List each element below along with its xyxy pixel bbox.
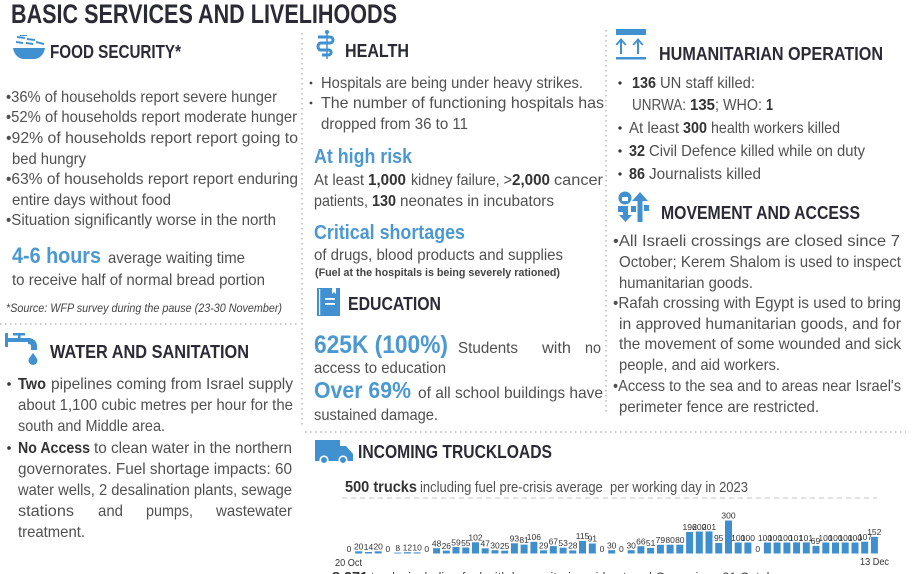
food security bullets: bed hungry [12, 151, 86, 168]
callout: waiting time: 4-6 hours [12, 243, 101, 268]
water bullets: No Access [18, 440, 90, 457]
bar chart: 25 [500, 541, 510, 551]
bar chart: 101 [799, 533, 813, 543]
access bullets: perimeter fence are restricted. [619, 399, 819, 416]
bar chart: 20 [373, 542, 383, 552]
heading: food security: FOOD SECURITY* [50, 42, 181, 62]
callout: waiting time [12, 243, 265, 289]
bar chart: 100 [778, 533, 793, 543]
source note: *Source: WFP survey during the pause (23-30 November) [6, 301, 282, 315]
bar chart: 102 [468, 532, 483, 542]
bar chart: 20 [354, 542, 364, 552]
food security bullets: •63% of households report report enduring [6, 171, 298, 188]
bar chart: 101 [789, 533, 803, 543]
bar chart: 69 [811, 536, 820, 546]
staff losses list: 136 [632, 75, 656, 92]
bar chart: 100 [768, 533, 782, 543]
water bullets: water wells, 2 desalination plants, sewage [17, 482, 292, 499]
heading: water and sanitation: WATER AND SANITATION [50, 342, 249, 362]
bar chart: 67 [549, 536, 558, 546]
icon: water tap [5, 333, 38, 365]
critical shortages: Critical shortages [314, 222, 465, 244]
food security bullets: •52% of households report moderate hunger [6, 109, 298, 126]
access bullets: •Rafah crossing with Egypt is used to bring [613, 295, 901, 312]
food security bullets: •92% of households report report going to [6, 130, 298, 147]
bar chart: 28 [568, 540, 578, 550]
access bullets: people, and aid workers. [619, 357, 780, 374]
staff losses list: 135 [690, 97, 715, 114]
icon: humanitarian arrows [616, 29, 646, 60]
at high risk: At high risk [314, 146, 413, 168]
school buildings stat: Over 69% [314, 377, 411, 403]
food security bullets: •36% of households report severe hunger [6, 89, 278, 106]
bar chart: 0 [600, 544, 605, 554]
icon: food bowl [13, 35, 45, 59]
water bullets: and [98, 503, 123, 520]
staff losses list: Journalists killed [649, 166, 761, 183]
staff losses list: 32 [629, 143, 645, 160]
bar chart: 80 [665, 535, 675, 545]
at high risk: 1,000 [368, 172, 406, 189]
critical shortages: (Fuel at the hospitals is being severely rationed) [315, 267, 560, 279]
bar chart: 80 [675, 535, 685, 545]
bar chart: 79 [656, 535, 665, 545]
school buildings stat: sustained damage. [314, 407, 438, 424]
access bullets: humanitarian goods. [619, 275, 753, 292]
hospital bullets: The number of functioning hospitals has [321, 95, 604, 112]
panel: humanitarian operation [616, 29, 883, 183]
bar chart: 12 [403, 542, 412, 552]
access bullets [613, 233, 902, 416]
water bullets: south and Middle area. [18, 418, 165, 435]
panel: water and sanitation [5, 333, 293, 541]
bar chart: 14 [364, 542, 373, 552]
bar chart: 55 [461, 538, 471, 548]
hospital bullets: Hospitals are being under heavy strikes. [321, 75, 583, 92]
access bullets: •All Israeli crossings are closed since 7 [613, 233, 900, 250]
food security bullets: entire days without food [12, 192, 171, 209]
at high risk: cancer [554, 172, 604, 189]
bar chart [335, 510, 889, 569]
water bullets: pipelines coming from Israel supply [51, 376, 293, 393]
icon: movement arrows with lock [618, 192, 649, 222]
bar chart: 100 [758, 533, 772, 543]
staff losses list: health workers killed [711, 120, 840, 137]
water bullets: pumps, [146, 503, 193, 520]
water bullets: wastewater [215, 503, 293, 520]
axis label: start date: 20 Oct [335, 558, 362, 569]
staff losses list [618, 75, 865, 183]
bar chart: 30 [490, 540, 500, 550]
students stat: access to education [314, 360, 446, 377]
bar chart: 0 [424, 544, 429, 554]
icon: caduceus [318, 30, 333, 59]
bar chart: 51 [646, 538, 656, 548]
callout: waiting time: to receive half of normal bread portion [12, 272, 265, 289]
at high risk: neonates in incubators [400, 193, 554, 210]
panel: incoming truckloads [315, 440, 889, 574]
bar chart: 91 [588, 534, 597, 544]
panel: movement and access [613, 192, 902, 416]
bar chart: 93 [510, 534, 519, 544]
bar chart: 48 [432, 538, 442, 548]
students stat: 625K (100%) [314, 331, 448, 359]
bar chart: 100 [731, 533, 746, 543]
bar chart: 300 [721, 510, 736, 520]
heading: health: HEALTH [345, 41, 409, 61]
water bullets: treatment. [18, 524, 85, 541]
pre-crisis average [342, 479, 877, 498]
bar chart: 106 [527, 532, 541, 542]
icon: truck [315, 440, 353, 464]
bar chart: 47 [480, 538, 490, 548]
food security bullets [6, 89, 298, 229]
bar chart: 100 [838, 533, 853, 543]
access bullets: October; Kerem Shalom is used to inspect [619, 254, 902, 271]
bar chart: 100 [848, 533, 862, 543]
bar chart: 30 [626, 540, 636, 550]
pre-crisis average: including fuel pre-crisis average per working day in 2023 [420, 479, 748, 496]
critical shortages: of drugs, blood products and supplies [314, 247, 563, 264]
critical shortages [314, 222, 563, 279]
callout: waiting time: average waiting time [108, 250, 245, 267]
staff losses list: UNRWA: [632, 97, 686, 114]
staff losses list: UN staff killed: [660, 75, 755, 92]
bar chart: 66 [636, 536, 646, 546]
panel: education [314, 288, 603, 424]
heading: incoming truckloads: INCOMING TRUCKLOADS [358, 442, 552, 462]
students stat: with [541, 340, 571, 357]
bar chart: 201 [702, 522, 716, 532]
water bullets: stations [18, 503, 74, 520]
bar chart: 29 [539, 540, 549, 550]
bar chart: 0 [619, 544, 624, 554]
at high risk: 130 [372, 193, 396, 210]
panel: food security [6, 35, 298, 315]
staff losses list: At least [629, 120, 680, 137]
bar chart: 0 [386, 544, 391, 554]
food security bullets: •Situation significantly worse in the north [6, 212, 276, 229]
students stat [314, 331, 601, 377]
access bullets: in approved humanitarian goods, and for [619, 316, 902, 333]
heading: humanitarian operation: HUMANITARIAN OPERATION [659, 44, 883, 64]
at high risk: At least [314, 172, 365, 189]
staff losses list: Civil Defence killed while on duty [649, 143, 865, 160]
panel: health [310, 30, 604, 279]
bar chart: 100 [828, 533, 843, 543]
water bullets: about 1,100 cubic metres per hour for the [18, 397, 293, 414]
bar chart: 100 [741, 533, 755, 543]
bar chart: 200 [692, 522, 707, 532]
bar chart: 0 [755, 544, 760, 554]
bar chart: 115 [576, 531, 590, 541]
at high risk [314, 146, 604, 210]
staff losses list: 300 [683, 120, 707, 137]
bar chart: 107 [858, 532, 872, 542]
heading: education: EDUCATION [348, 294, 441, 314]
hospital bullets: dropped from 36 to 11 [321, 116, 468, 133]
icon: book [317, 288, 340, 316]
bar chart: 152 [867, 527, 882, 537]
school buildings stat: of all school buildings have [418, 385, 603, 402]
axis label: end date: 13 Dec [860, 557, 889, 568]
bar chart: 26 [442, 541, 451, 551]
pre-crisis average: 500 trucks [345, 479, 417, 496]
at high risk: patients, [314, 193, 368, 210]
staff losses list: ; WHO: [715, 97, 762, 114]
bar chart: 0 [347, 544, 352, 554]
water bullets: governorates. Fuel shortage impacts: 60 [18, 461, 292, 478]
water bullets: to clean water in the northern [94, 440, 292, 457]
bar chart: 53 [558, 538, 568, 548]
bar chart: 100 [818, 533, 833, 543]
water bullets: Two [18, 376, 46, 393]
school buildings stat [314, 377, 603, 424]
hospital bullets [310, 75, 604, 133]
bar chart: 59 [451, 538, 461, 548]
students stat: no [585, 340, 601, 357]
bar chart: 95 [714, 533, 724, 543]
bar chart: 10 [412, 542, 422, 552]
bar chart: 8 [395, 543, 400, 553]
staff losses list: 86 [629, 166, 645, 183]
heading: movement and access: MOVEMENT AND ACCESS [661, 203, 860, 223]
bar chart: 81 [519, 535, 529, 545]
students stat: Students [458, 340, 518, 357]
water bullets [7, 376, 293, 541]
at high risk: kidney failure, > [411, 172, 512, 189]
at high risk: 2,000 [512, 172, 550, 189]
access bullets: the movement of some wounded and sick [619, 336, 902, 353]
staff losses list: 1 [766, 97, 773, 114]
bar chart: 196 [683, 522, 697, 532]
bar chart: 30 [607, 540, 617, 550]
